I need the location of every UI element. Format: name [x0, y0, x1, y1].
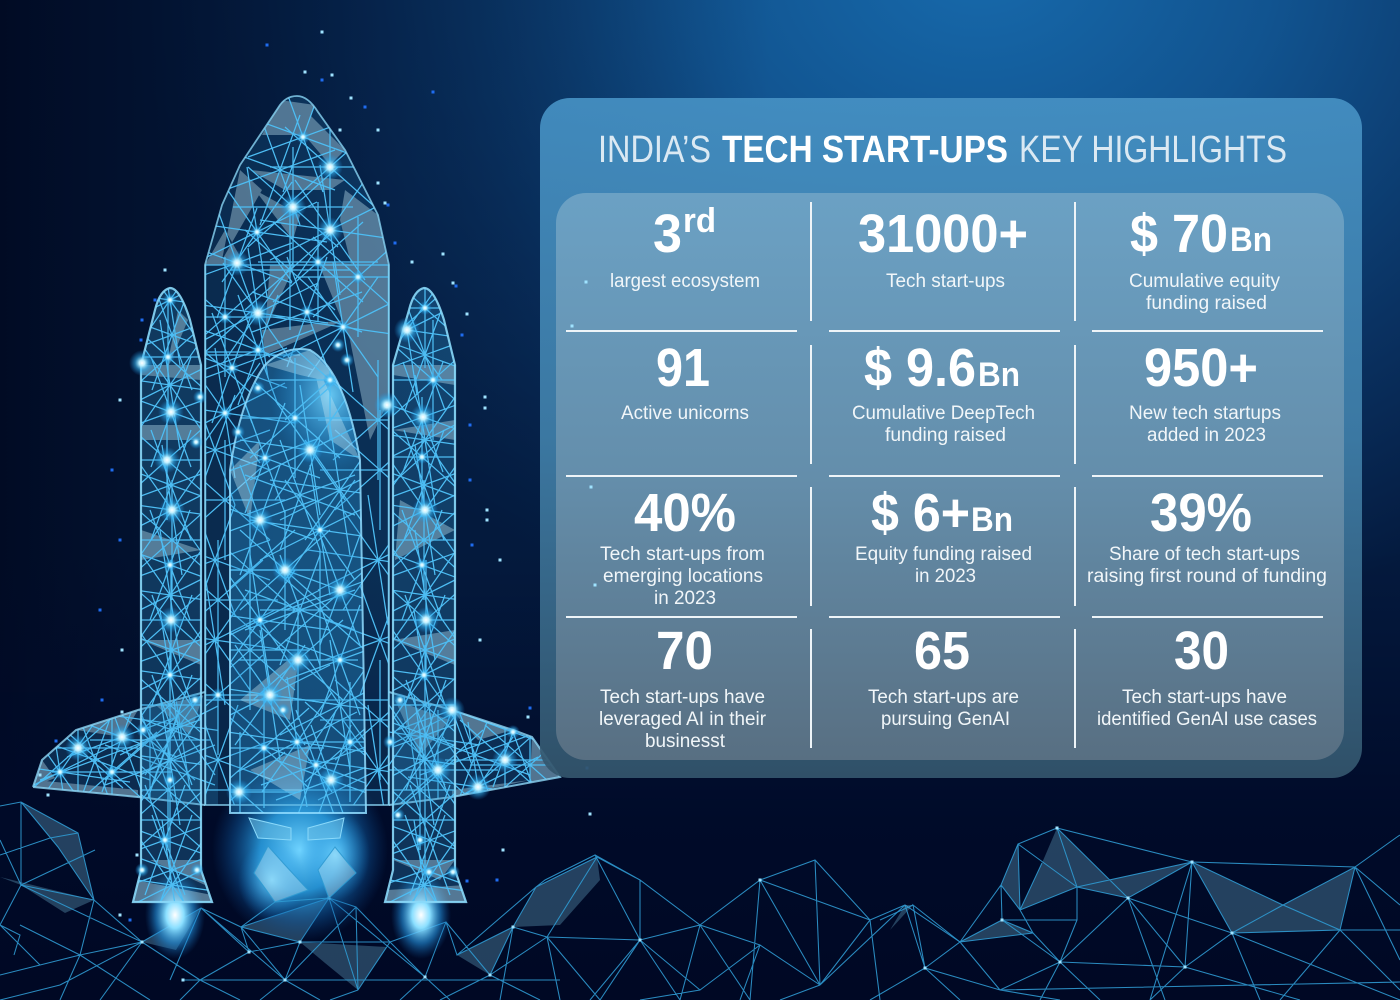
icon: rocket — [0, 82, 590, 950]
stat: 950+ new startups: New tech startups — [1129, 403, 1281, 424]
panel background — [540, 98, 1362, 778]
stat: 950+ new startups: added in 2023 — [1147, 425, 1266, 446]
stat: 30 GenAI use cases: Tech start-ups have — [1122, 687, 1287, 708]
heading: INDIA’S — [598, 129, 711, 171]
stat: $9.6Bn deeptech funding — [852, 338, 1035, 446]
stat: 70 AI businesses: businesst — [645, 731, 726, 752]
rocket: right booster — [385, 288, 466, 902]
stat: 3rd largest ecosystem: 3 — [653, 204, 682, 264]
stat: 70 AI businesses: leveraged AI in their — [599, 709, 767, 730]
stat: $9.6Bn deeptech funding: funding raised — [885, 425, 1006, 446]
stat: 70 AI businesses: Tech start-ups have — [600, 687, 765, 708]
rocket: left wing — [33, 693, 218, 804]
stat: 39% first round: 39% — [1150, 483, 1252, 543]
stat: 70 AI businesses — [599, 621, 767, 752]
stat: 950+ new startups: 950+ — [1144, 338, 1258, 398]
icon: rocket engine flames — [145, 758, 451, 959]
stat: 70 AI businesses: 70 — [656, 621, 713, 681]
stat: 31000+ tech start-ups: Tech start-ups — [886, 271, 1005, 292]
stat: 39% first round: raising first round of funding — [1087, 566, 1327, 587]
rocket: inner orbiter — [230, 349, 366, 813]
terrain: bright nodes — [140, 826, 1234, 982]
stat: 3rd largest ecosystem — [610, 202, 760, 292]
stat: 91 active unicorns: 91 — [656, 338, 710, 398]
floating particles — [38, 30, 592, 922]
stat: 40% emerging locations — [600, 483, 765, 609]
stat: 39% first round: Share of tech start-ups — [1109, 544, 1300, 565]
stat: 65 GenAI: Tech start-ups are — [868, 687, 1019, 708]
terrain: left peaks — [0, 802, 960, 1000]
stat: $6+Bn equity funding: $ 6+ — [871, 483, 970, 543]
stat: 91 active unicorns: Active unicorns — [621, 403, 749, 424]
stat: 40% emerging locations: 40% — [634, 483, 736, 543]
stat: $70Bn equity funding: Cumulative equity — [1129, 271, 1280, 292]
stat: 40% emerging locations: emerging locations — [603, 566, 763, 587]
stat: 950+ new startups — [1129, 338, 1281, 446]
stat: 40% emerging locations: in 2023 — [654, 588, 716, 609]
stat: $9.6Bn deeptech funding: $ 9.6 — [864, 338, 976, 398]
stat: $6+Bn equity funding: in 2023 — [915, 566, 976, 587]
stat: 65 GenAI: 65 — [914, 621, 970, 681]
heading: TECH START-UPS — [722, 129, 1008, 171]
stat: 31000+ tech start-ups: 31000+ — [858, 204, 1028, 264]
stat: $70Bn equity funding: funding raised — [1146, 293, 1267, 314]
particles over panel — [570, 280, 596, 586]
stat: 30 GenAI use cases: identified GenAI use cases — [1097, 709, 1317, 730]
rocket: main body — [205, 96, 389, 805]
stat: 40% emerging locations: Tech start-ups from — [600, 544, 765, 565]
stat: $9.6Bn deeptech funding: Bn — [978, 356, 1020, 394]
terrain: right peaks — [870, 828, 1400, 1000]
stat: 31000+ tech start-ups — [858, 204, 1028, 292]
stat: 65 GenAI — [868, 621, 1019, 730]
heading: KEY HIGHLIGHTS — [1019, 129, 1287, 171]
stat: 3rd largest ecosystem: rd — [683, 202, 716, 240]
inner stats card — [556, 193, 1344, 760]
rocket: right wing — [389, 693, 560, 804]
low-poly terrain mesh — [0, 802, 1400, 1000]
stat: 39% first round — [1087, 483, 1327, 587]
stat: 30 GenAI use cases — [1097, 621, 1317, 730]
grid dividers — [566, 202, 1323, 748]
stat: $6+Bn equity funding — [855, 483, 1032, 587]
stat: $70Bn equity funding: Bn — [1230, 221, 1272, 259]
stat: $70Bn equity funding: $ 70 — [1130, 204, 1228, 264]
stat: $6+Bn equity funding: Bn — [971, 501, 1013, 539]
panel: key highlights — [540, 98, 1362, 778]
rocket: left booster — [133, 288, 212, 902]
stat: 65 GenAI: pursuing GenAI — [881, 709, 1010, 730]
stat: 30 GenAI use cases: 30 — [1174, 621, 1229, 681]
stat: $70Bn equity funding — [1129, 204, 1280, 314]
stat: $9.6Bn deeptech funding: Cumulative DeepTech — [852, 403, 1035, 424]
rocket: nozzle plates — [249, 818, 344, 840]
stat: 91 active unicorns — [621, 338, 749, 424]
stat: $6+Bn equity funding: Equity funding raised — [855, 544, 1032, 565]
stat: 3rd largest ecosystem: largest ecosystem — [610, 271, 760, 292]
rocket: glowing nodes — [53, 130, 520, 879]
